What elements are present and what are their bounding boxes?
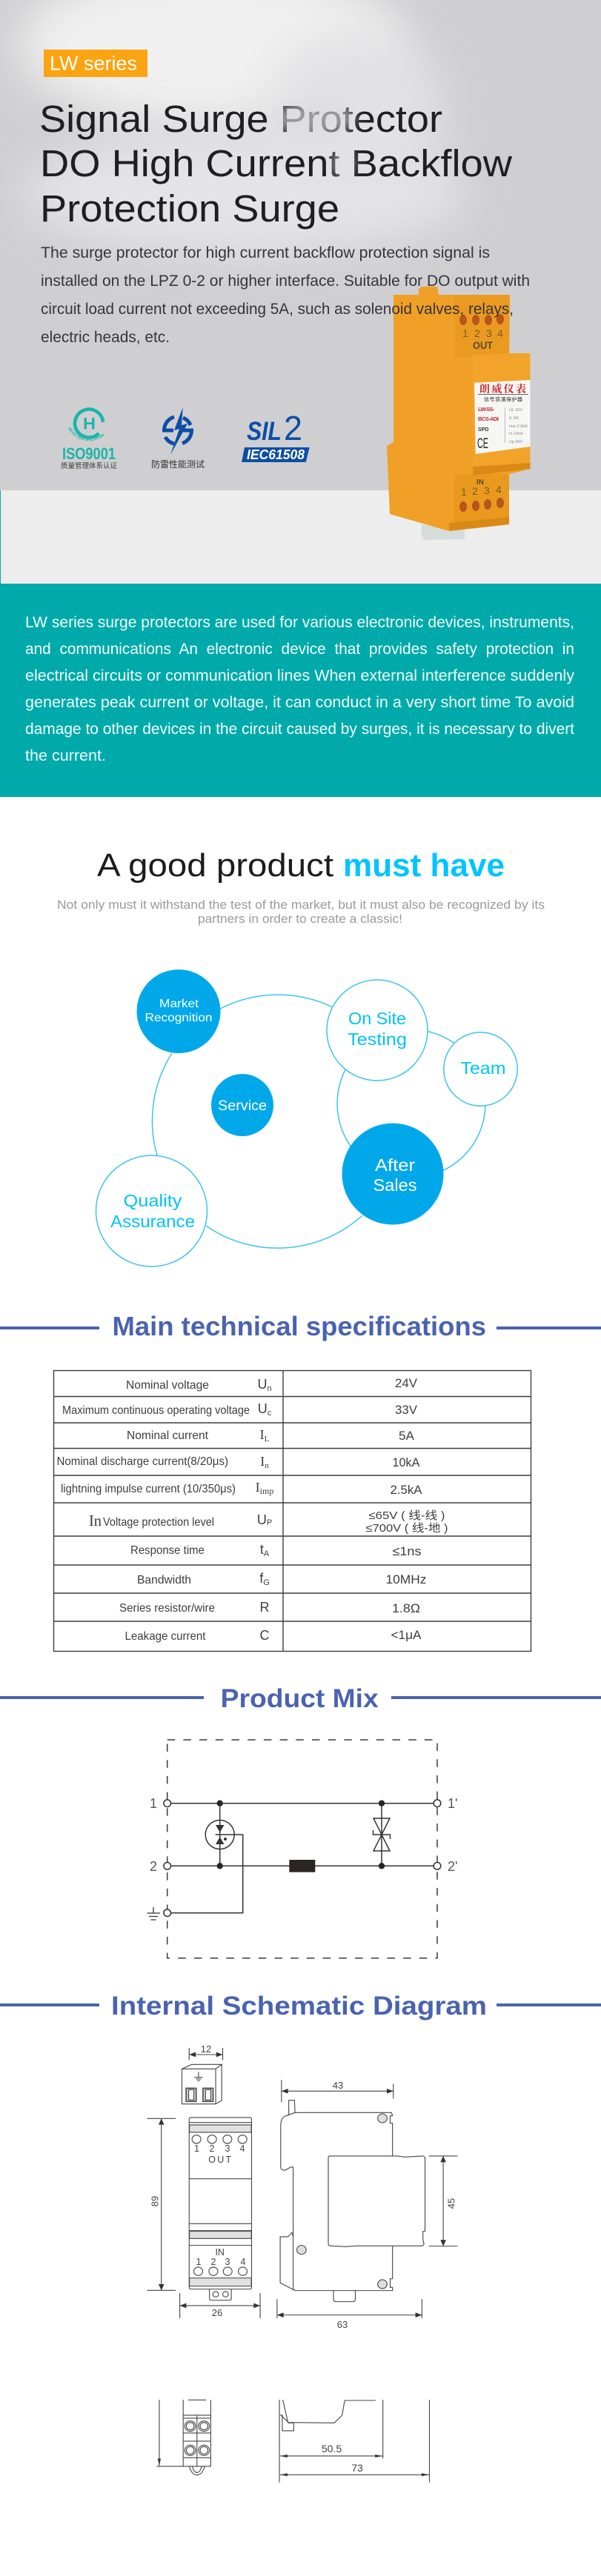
series tag [44, 50, 147, 77]
hero left edge line [0, 490, 1, 584]
parameter names: Nominal voltage [126, 1379, 209, 1392]
drawing labels: 3 [225, 2143, 230, 2154]
parameter symbols: I [260, 1427, 265, 1442]
circuit nodes [216, 1800, 385, 1869]
terminal block [182, 2064, 222, 2104]
input terminal labels: IN [477, 478, 484, 487]
parameter values: 10MHz [385, 1572, 427, 1586]
heading: internal schematic diagram: Internal Schematic Diagram [111, 1992, 487, 2021]
drawing labels: OUT [208, 2155, 232, 2165]
label text: SPD [478, 427, 488, 433]
bubble: team: Team [461, 1058, 505, 1078]
bubble: after sales: After [375, 1155, 415, 1175]
introduction text [25, 614, 575, 764]
logo: ISO9001 certification: H [83, 415, 96, 433]
terminals [164, 1800, 441, 1917]
label text: 信号浪涌保护器 [484, 396, 522, 403]
connecting arcs [152, 995, 485, 1248]
parameter symbols: C [259, 1628, 270, 1643]
title: Signal Surge Protector [39, 98, 442, 140]
dashed enclosure [167, 1740, 437, 1958]
lower terminal recess [454, 474, 509, 527]
parameter symbols: I [256, 1480, 260, 1495]
diagram: dimensional drawings lower [156, 2400, 430, 2483]
lower bar [473, 463, 531, 476]
terminal labels: 2ʹ [448, 1859, 457, 1874]
parameter names: Nominal discharge current(8/20μs) [56, 1455, 228, 1468]
drawing labels: 45 [446, 2198, 456, 2209]
drawing labels: 26 [212, 2307, 222, 2318]
drawing labels: 4 [240, 2143, 245, 2154]
terminal labels: 2 [150, 1859, 157, 1874]
drawing linework [147, 2048, 457, 2318]
parameter symbols: A [264, 1549, 270, 1558]
label text: LW-SS- [478, 406, 495, 413]
table: technical specifications [53, 1370, 531, 1652]
parameter symbols: L [265, 1435, 270, 1444]
diagram: bubble relationship [96, 970, 517, 1267]
introduction text: and communications An electronic device that provides safety protection in [25, 641, 574, 658]
hero lower band [0, 490, 601, 584]
input terminal labels: 1 [461, 486, 467, 498]
ground symbol [147, 1907, 160, 1920]
parameter symbols: U [258, 1401, 268, 1416]
front view [189, 2118, 251, 2300]
panel: teal introduction [0, 584, 601, 797]
parameter symbols: G [263, 1578, 270, 1587]
parameter symbols: n [267, 1384, 272, 1393]
logo: SIL2 IEC61508 [242, 409, 310, 462]
upper terminal recess [454, 295, 510, 358]
label sticker [474, 380, 531, 454]
parameter values: 24V [395, 1376, 418, 1390]
hero grey background [0, 0, 601, 490]
bubble: quality assurance [96, 1155, 207, 1267]
hero description: The surge protector for high current backflow protection signal is [41, 244, 490, 261]
logo: ISO9001 certification [61, 407, 117, 470]
width dimensions [279, 2400, 430, 2483]
parameter symbols: I [260, 1454, 265, 1469]
label text: CE [477, 436, 488, 452]
output terminal holes [459, 314, 504, 325]
terminal labels: 1 [150, 1796, 157, 1811]
introduction text: electrical circuits or communication lines When external interference suddenly [25, 667, 575, 684]
drawing labels: 63 [337, 2319, 348, 2330]
hero description [41, 244, 530, 346]
bubble: team [444, 1032, 517, 1106]
orange housing [387, 287, 531, 531]
heading: main technical specifications [0, 1311, 601, 1341]
rail side profile [280, 2400, 376, 2431]
parameter symbols [256, 1377, 273, 1643]
bubble: after sales: Sales [373, 1175, 416, 1195]
logo: ISO9001 certification: 质量管理体系认证 [61, 461, 117, 470]
parameter values: ≤1ns [393, 1544, 421, 1558]
title [39, 98, 512, 230]
bubble: service [211, 1074, 273, 1136]
output terminal labels: OUT [473, 339, 493, 351]
parameter values: 10kA [393, 1455, 420, 1469]
parameter names: Maximum continuous operating voltage [62, 1404, 250, 1417]
drawing labels: 2 [210, 2143, 215, 2154]
drawing labels: 89 [150, 2196, 160, 2206]
label text: BCS-ADI [478, 416, 499, 422]
parameter values: 2.5kA [390, 1483, 422, 1497]
series tag: LW series [50, 52, 137, 74]
logo: lightning protection test [151, 407, 205, 470]
lower drawing linework [156, 2400, 430, 2483]
label text [477, 381, 528, 452]
output terminal labels [462, 327, 503, 351]
label text: In 10kA [509, 432, 523, 436]
introduction text: damage to other devices in the circuit caused by surges, it is necessary to divert [25, 721, 574, 738]
logo: SIL2 IEC61508: SIL [247, 417, 282, 446]
output terminal labels: 1 [462, 327, 468, 339]
logo: SIL2 IEC61508: 2 [284, 409, 302, 447]
logo: SIL2 IEC61508: IEC61508 [247, 447, 305, 462]
lower drawing labels [322, 2443, 363, 2474]
label text: IL 5A [509, 416, 519, 421]
title: DO High Current Backflow [40, 142, 512, 184]
lower drawing labels: 73 [351, 2462, 363, 2474]
parameter names: Bandwidth [137, 1574, 191, 1586]
parameter values: 5A [399, 1429, 415, 1443]
heading: product mix [0, 1684, 601, 1713]
height dimension [156, 2400, 183, 2466]
hero description: circuit load current not exceeding 5A, such as solenoid valves, relays, [41, 301, 514, 318]
drawing labels: 43 [333, 2080, 343, 2091]
subheading text: Not only must it withstand the test of the market, but it must also be recognized by its [57, 898, 545, 912]
subheading text [57, 898, 545, 926]
bubble: market recognition: Market [159, 998, 199, 1010]
parameter symbols: f [259, 1571, 263, 1586]
metal rail clip [422, 524, 465, 540]
drawing labels: 1 [194, 2143, 199, 2154]
drawing labels [150, 2043, 456, 2330]
bubble: market recognition [136, 970, 221, 1053]
heading: a good product must have: A good product [97, 847, 333, 884]
terminal labels: 1ʹ [448, 1796, 457, 1811]
panel: hero [0, 0, 601, 584]
input terminal holes [459, 498, 504, 512]
parameter symbols: U [257, 1377, 267, 1392]
parameter names: Response time [130, 1544, 205, 1557]
parameter names: lightning impulse current (10/350μs) [61, 1483, 236, 1495]
drawing labels: 4 [241, 2257, 246, 2267]
bubble: quality assurance: Assurance [110, 1212, 195, 1231]
introduction text: the current. [25, 747, 106, 764]
parameter names: Voltage protection level [103, 1516, 214, 1529]
product photo: orange surge protector [387, 287, 531, 540]
circuit wires [167, 1803, 437, 1913]
parameter values: <1μA [391, 1628, 422, 1642]
parameter symbols: imp [260, 1486, 273, 1496]
drawing labels: 2 [211, 2257, 216, 2267]
subheading text: partners in order to create a classic! [198, 912, 402, 926]
drawing labels: 12 [201, 2043, 211, 2055]
title highlight [283, 106, 363, 176]
heading: internal schematic diagram [0, 1992, 601, 2021]
table grid [53, 1370, 531, 1652]
series resistor [289, 1860, 315, 1872]
din rail end view [183, 2400, 210, 2475]
teal background [0, 584, 601, 797]
heading: a good product must have [97, 847, 505, 884]
input terminal labels: 3 [484, 484, 490, 496]
bubble: on site testing: On Site [348, 1009, 406, 1028]
input terminal labels: 4 [496, 484, 502, 495]
gas discharge tube [205, 1821, 234, 1849]
parameter symbols: t [260, 1542, 264, 1557]
terminal labels [150, 1796, 457, 1874]
TVS diode [373, 1818, 390, 1851]
heading: product mix: Product Mix [221, 1684, 379, 1713]
introduction text: generates peak current or voltage, it can conduct in a very short time To avoid [25, 694, 574, 711]
middle body [473, 353, 531, 476]
side view [280, 2100, 425, 2302]
label text: Up 65V [509, 440, 523, 444]
bubble: on site testing [327, 980, 428, 1081]
parameter symbols: P [267, 1518, 272, 1527]
parameter symbols: n [265, 1461, 269, 1470]
heading: a good product must have: must have [343, 847, 505, 884]
parameter symbols: R [259, 1600, 270, 1615]
logo: ISO9001 certification: ISO9001 [62, 444, 116, 463]
bubble: quality assurance: Quality [123, 1191, 182, 1210]
label text: UL 32V [509, 408, 522, 413]
parameter names: Nominal current [127, 1429, 209, 1442]
output terminal labels: 4 [497, 327, 503, 339]
dimension arrowheads [159, 2052, 446, 2318]
parameter names: Series resistor/wire [119, 1602, 215, 1615]
parameter values [366, 1376, 448, 1642]
bubble: market recognition: Recognition [145, 1012, 212, 1024]
parameter names: In [89, 1512, 102, 1529]
logo: lightning protection test: 防雷性能测试 [151, 458, 205, 470]
bubble: service: Service [218, 1098, 267, 1114]
parameter names [56, 1379, 250, 1643]
dimension lines [147, 2048, 457, 2318]
drawing labels: 1 [196, 2257, 202, 2267]
parameter values: 33V [395, 1403, 418, 1417]
hero description: electric heads, etc. [41, 329, 170, 346]
label text: Imp 2.5kA [509, 424, 528, 429]
parameter values: 1.8Ω [392, 1601, 420, 1615]
title: Protection Surge [40, 187, 339, 230]
parameter names: Leakage current [124, 1630, 206, 1643]
output terminal labels: 2 [474, 327, 480, 339]
lower drawing labels: 50.5 [322, 2443, 342, 2455]
output terminal labels: 3 [486, 327, 492, 339]
hero description: installed on the LPZ 0-2 or higher interface. Suitable for DO output with [41, 273, 530, 290]
drawing labels: IN [215, 2247, 225, 2258]
diagram: dimensional drawings upper [147, 2043, 457, 2330]
input terminal labels: 2 [472, 485, 478, 497]
bubble: on site testing: Testing [348, 1030, 407, 1049]
bubble: after sales [342, 1123, 443, 1225]
input terminal labels [461, 478, 502, 498]
diagram: circuit schematic [147, 1740, 457, 1958]
parameter symbols: U [257, 1512, 267, 1527]
drawing labels: 3 [225, 2257, 230, 2267]
parameter values: ≤65V ( 线-线 ) [369, 1509, 445, 1522]
parameter symbols: c [268, 1409, 272, 1418]
parameter values: ≤700V ( 线-地 ) [366, 1522, 448, 1535]
introduction text: LW series surge protectors are used for various electronic devices, instruments, [25, 614, 574, 631]
heading: main technical specifications: Main technical specifications [113, 1311, 486, 1341]
logo: ISO9001 certification: HEAD CERTIFICATION [68, 427, 104, 441]
label text: 朗威仪表 [479, 381, 526, 396]
